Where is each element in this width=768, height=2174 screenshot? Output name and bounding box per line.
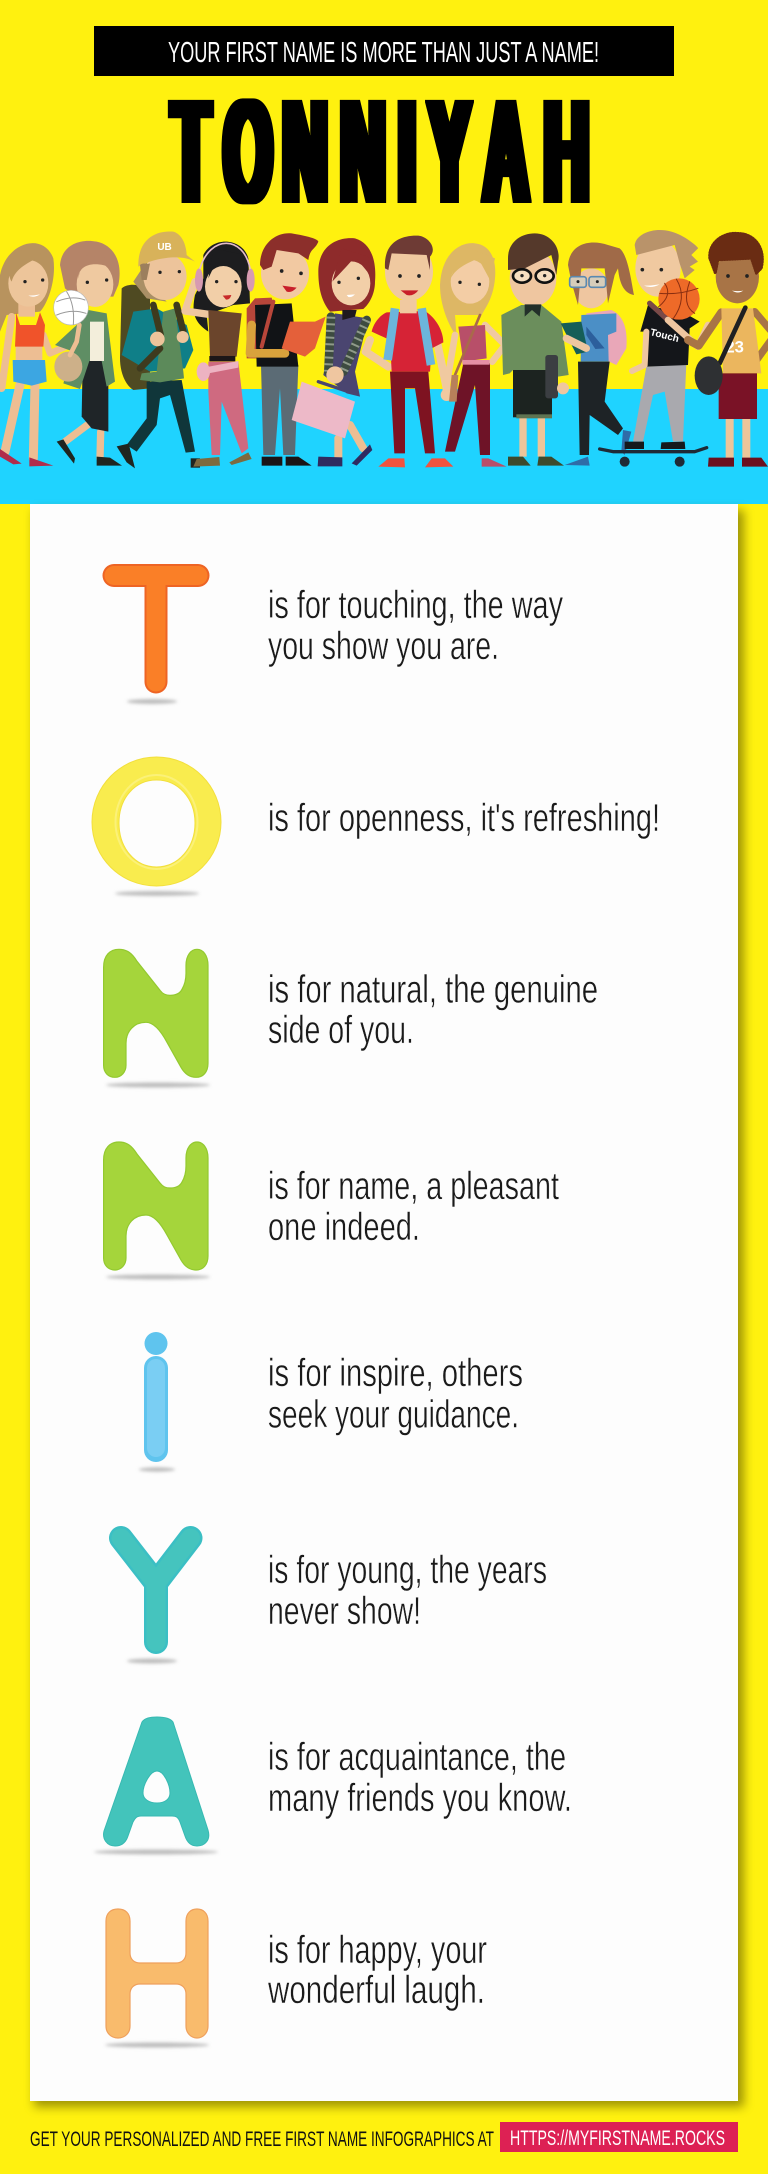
- text: side of you.: [268, 1009, 414, 1052]
- title: name: TONNIYAH: [172, 69, 589, 233]
- blue floor band: [0, 389, 768, 504]
- text: [268, 1165, 559, 1249]
- text: never show!: [268, 1590, 421, 1633]
- icon: letter i: [139, 1332, 175, 1472]
- text: [268, 968, 598, 1052]
- panel: name letters: [30, 504, 738, 2101]
- text: is for name, a pleasant: [268, 1165, 559, 1208]
- row Y: [121, 1538, 547, 1664]
- row N: [104, 949, 598, 1088]
- row O: [92, 757, 660, 896]
- person 4: girl with headphones: [185, 242, 255, 467]
- text: [268, 1736, 572, 1820]
- person 2: girl with volleyball: [54, 241, 122, 466]
- person 5: boy with red book: [247, 233, 326, 466]
- text: [268, 1549, 547, 1633]
- person 3: hiker with cap and backpack: UB: [157, 242, 172, 253]
- footer url badge: [500, 2122, 738, 2152]
- icon: letter H: [105, 1909, 209, 2048]
- text: you show you are.: [268, 625, 499, 668]
- text: is for inspire, others: [268, 1352, 523, 1395]
- person 10: girl with ponytail and tablet: [561, 242, 634, 466]
- footer call to action: GET YOUR PERSONALIZED AND FREE FIRST NAME INFOGRAPHICS AT: [30, 2128, 494, 2151]
- person 9: boy with glasses: [501, 233, 569, 466]
- row N second: [104, 1142, 559, 1280]
- text: many friends you know.: [268, 1777, 572, 1820]
- person 12: boy in tank top with bag: [688, 233, 768, 467]
- text: is for natural, the genuine: [268, 968, 598, 1012]
- text: [268, 584, 563, 668]
- icon: letter A: [94, 1717, 218, 1854]
- icon: letter N: [104, 949, 210, 1088]
- text: is for happy, your: [268, 1929, 487, 1972]
- person 11: boy on skateboard with basketball: Touch: [649, 327, 680, 345]
- icon: letter Y: [121, 1538, 190, 1664]
- person 1: girl in orange top: [0, 243, 77, 466]
- row A: [94, 1717, 572, 1854]
- row T: [114, 576, 563, 704]
- row H: [105, 1909, 487, 2048]
- text: is for young, the years: [268, 1549, 547, 1592]
- icon: letter O: [92, 757, 221, 896]
- person 11: boy on skateboard with basketball: [600, 230, 708, 467]
- person 6: girl with pink bag: [292, 238, 375, 466]
- illustration: group of twelve students: [0, 230, 768, 468]
- main white panel shadow: [34, 510, 744, 2107]
- text: seek your guidance.: [268, 1394, 519, 1436]
- text: [268, 1352, 523, 1436]
- person 3: hiker with cap and backpack: [117, 231, 200, 468]
- icon: letter T: [114, 576, 198, 704]
- text: is for acquaintance, the: [268, 1736, 566, 1779]
- row I: [139, 1332, 523, 1472]
- person 8: blonde girl: [440, 243, 507, 467]
- text: is for touching, the way: [268, 584, 563, 627]
- person 12: boy in tank top with bag: 23: [725, 337, 744, 356]
- header banner: [94, 26, 674, 76]
- person 7: boy in red tee: [366, 236, 453, 467]
- text: wonderful laugh.: [267, 1969, 485, 2012]
- text: [267, 1929, 487, 2012]
- icon: letter N: [104, 1142, 210, 1280]
- text: one indeed.: [268, 1206, 420, 1249]
